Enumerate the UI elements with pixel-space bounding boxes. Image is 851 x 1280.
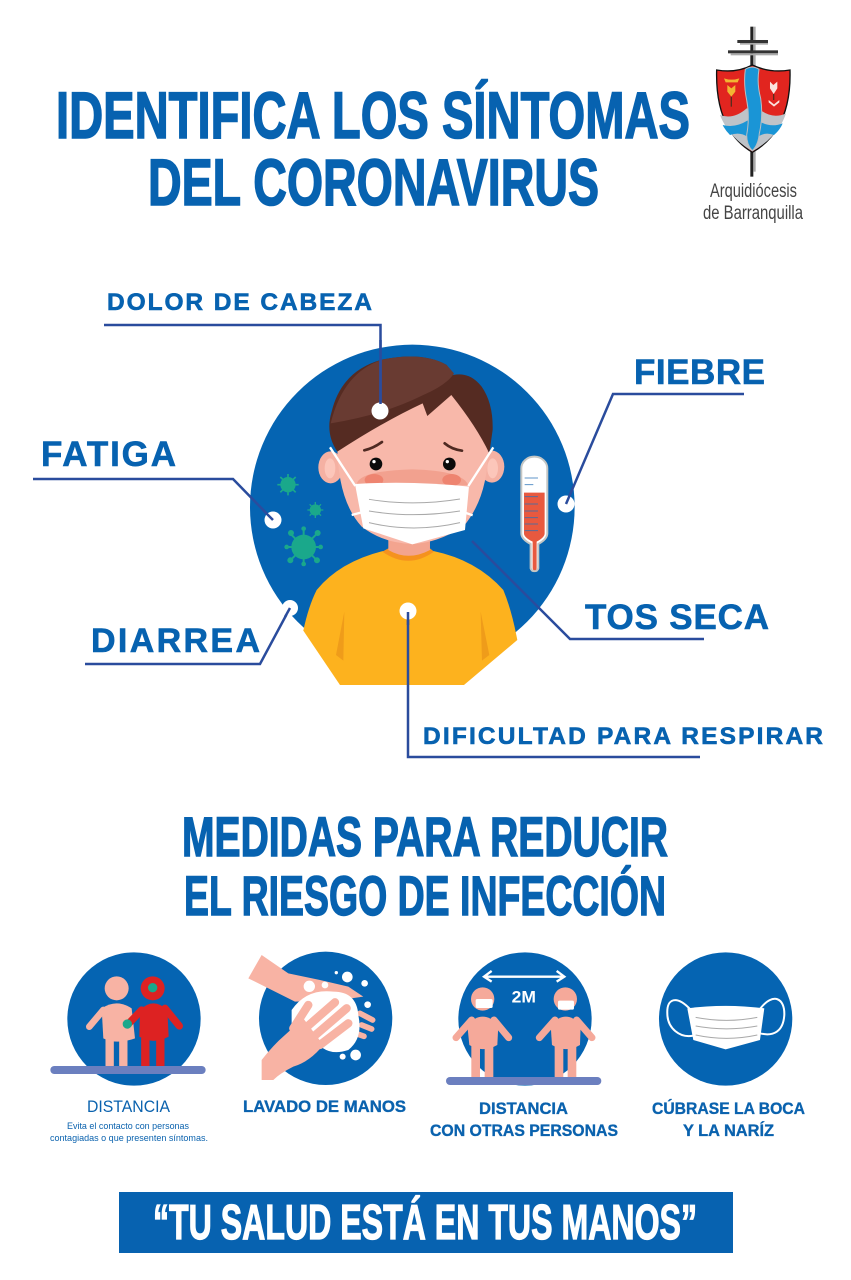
label: distancia: DISTANCIA bbox=[87, 1097, 171, 1116]
label: fatiga: FATIGA bbox=[41, 435, 176, 474]
panel: distancia bbox=[50, 952, 208, 1144]
title bbox=[56, 78, 690, 219]
label: distancia con otras personas: CON OTRAS PERSONAS bbox=[430, 1121, 618, 1140]
callout line ends over dots bbox=[263, 340, 572, 625]
cheeks bbox=[357, 469, 468, 485]
label: cubrase la boca: CÚBRASE LA BOCA bbox=[652, 1099, 805, 1118]
label: cubrase la boca: Y LA NARÍZ bbox=[683, 1121, 774, 1140]
label: tos seca: TOS SECA bbox=[585, 598, 769, 637]
label: lavado de manos: LAVADO DE MANOS bbox=[243, 1097, 406, 1116]
hair bbox=[329, 357, 493, 453]
label: distancia con otras personas bbox=[430, 1099, 618, 1140]
icon: two people 2 meters apart: 2M bbox=[512, 987, 536, 1006]
panel: distancia con otras personas bbox=[430, 952, 618, 1140]
ears bbox=[318, 451, 343, 483]
face mask bbox=[355, 483, 469, 544]
illustration: sick boy with mask bbox=[250, 345, 575, 685]
logo: Arquidiócesis de Barranquilla bbox=[703, 27, 803, 224]
text: archdiocese name: Arquidiócesis bbox=[710, 181, 797, 202]
label: dolor de cabeza: DOLOR DE CABEZA bbox=[107, 289, 372, 316]
icon: face mask bbox=[659, 952, 792, 1086]
label: fiebre: FIEBRE bbox=[634, 353, 765, 392]
shirt bbox=[303, 551, 517, 685]
title: DEL CORONAVIRUS bbox=[148, 145, 599, 219]
icon: washing hands bbox=[248, 952, 392, 1085]
label: distancia con otras personas: DISTANCIA bbox=[479, 1099, 568, 1118]
eyebrows bbox=[364, 442, 462, 451]
icon: viruses bbox=[277, 474, 323, 566]
text: archdiocese name bbox=[703, 181, 803, 224]
symptom labels bbox=[41, 289, 823, 750]
icon: healthy and infected people bbox=[50, 952, 206, 1086]
neck bbox=[382, 548, 434, 561]
blue circle background bbox=[250, 345, 575, 669]
icon: thermometer bbox=[521, 457, 547, 571]
label: dificultad para respirar: DIFICULTAD PARA RESPIRAR bbox=[423, 723, 823, 750]
panel: cubrase la boca bbox=[652, 952, 805, 1140]
face bbox=[337, 383, 488, 544]
text: distance description: contagiadas o que presenten síntomas. bbox=[50, 1133, 208, 1144]
label: diarrea: DIARREA bbox=[91, 622, 260, 660]
panel: lavado de manos bbox=[243, 952, 406, 1116]
label: cubrase la boca bbox=[652, 1099, 805, 1140]
eyes bbox=[370, 458, 382, 470]
callout: connector lines bbox=[33, 325, 744, 757]
heading: medidas bbox=[182, 805, 668, 927]
mask straps bbox=[330, 447, 493, 515]
text: distance description bbox=[50, 1121, 208, 1144]
icon: coat of arms bbox=[717, 27, 790, 177]
callout: white dots bbox=[264, 402, 574, 620]
text: distance description: Evita el contacto con personas bbox=[67, 1121, 189, 1132]
text: archdiocese name: de Barranquilla bbox=[703, 203, 803, 224]
icon: two people 2 meters apart bbox=[446, 952, 601, 1086]
